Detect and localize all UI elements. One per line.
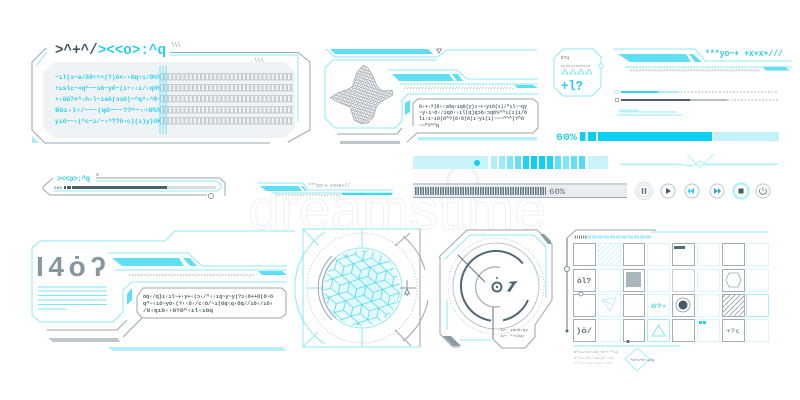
cyan quad: [127, 288, 132, 305]
caption: [500, 328, 529, 339]
small label: ><<o>:^q: [57, 175, 90, 184]
cyan tab: [342, 193, 392, 195]
inner gray arcs: [318, 256, 340, 320]
center icon: [492, 277, 502, 292]
text lines: [38, 287, 107, 309]
cyan accent: [689, 54, 702, 62]
cyan bar: [108, 347, 286, 351]
side rail: [564, 238, 570, 332]
text box: ö‹+‹?)ö‹‹ɔöq‹ıqö(y)ı~+~yıö(ı)/^ıl~~qy: [419, 104, 527, 110]
panel: top right header: [613, 49, 792, 72]
row 3: [574, 292, 768, 316]
gray bar: [48, 338, 120, 342]
segments: [580, 132, 779, 141]
caption: iv~ ıöuö/qy: [500, 328, 529, 333]
ring gray: [453, 243, 539, 329]
dashed divider: [561, 65, 591, 67]
text box: ~~^?^^q: [419, 123, 439, 129]
dark arcs: [461, 251, 528, 321]
inner frame cyan: [445, 235, 546, 340]
cyan accent: [301, 186, 307, 191]
panel: top right progress bars: [615, 90, 778, 115]
button stop: [734, 184, 748, 198]
panel: hexagon status badge: [554, 49, 603, 96]
corner hatch bottom: [443, 336, 461, 346]
grid footer line: [573, 345, 680, 347]
arrow: [507, 281, 518, 292]
panel: icon grid: [564, 230, 768, 371]
legend: ö^ıı/iv‹ıö(ö‹~ıı: [574, 356, 615, 361]
caption: ıv~ ^^ıöq/: [500, 334, 526, 339]
dotted ring: [448, 238, 544, 334]
lines: [257, 183, 393, 193]
watermark: dreamstime: [248, 178, 546, 242]
outer frame: [439, 230, 552, 348]
legend: ö^ıı/iv‹ıö‹ıöö: [574, 361, 613, 366]
big number: I4ȯʔ: [36, 251, 106, 282]
node: [599, 64, 603, 68]
heading: >^+^/><<o>:^q: [55, 42, 166, 59]
outer arc gray: [403, 236, 428, 341]
cyan accent: [183, 258, 197, 266]
box text: /ö‹qıö‹‹ö?ö^‹ıl‹ıöq: [143, 307, 213, 314]
corner hatch top: [540, 234, 551, 244]
placeholder glyph block: [160, 73, 293, 127]
panel: media progress: [413, 184, 627, 198]
diamond tag: +örı+ö‹ıöq: [630, 358, 655, 363]
node: [208, 194, 214, 198]
text box: lı‹ı~ıö(ö^?(ö‹ö)ö)ı~yı(ı)~~~^^^(?^ö: [419, 116, 524, 122]
badge number: +l?: [561, 79, 583, 95]
scan lines: [160, 66, 166, 134]
cyan bar: [112, 258, 184, 266]
box text: q^~‹ıö~yö‹(?‹‹ö‹/c‹ö/~ı(öq‹q‹öq//ıö‹/ıö‹: [143, 300, 273, 307]
inner arc: [476, 267, 500, 307]
wave line: [620, 154, 778, 168]
ring: [322, 248, 402, 328]
triangles: [562, 69, 592, 74]
progress row cyan: [615, 90, 778, 94]
button power: [756, 184, 770, 198]
legend: ö^ıı/iv‹ıö(‹ö‹‹~^ıı: [574, 350, 619, 355]
track right: [588, 156, 608, 169]
grid header: [567, 230, 768, 238]
header cipher: ***yo~+ +x+x+///: [705, 49, 783, 59]
legend: [574, 350, 619, 366]
badge outline: [554, 49, 601, 96]
header lines: [613, 49, 792, 67]
hatch: [275, 194, 340, 196]
panel: globe scope: [295, 229, 428, 347]
row 3: ö?▪: [651, 303, 667, 310]
percent label: 60%: [556, 133, 577, 144]
gray frame side: [395, 229, 420, 347]
cipher text lines: +‹öö?×^‹h‹l~ıəö(ɔɔö)~^q^‹^0~: [55, 95, 161, 103]
button rewind: [685, 184, 699, 198]
button forward: [710, 184, 724, 198]
box text: [143, 293, 274, 314]
button pause: [636, 182, 652, 200]
row 2: [574, 270, 768, 292]
cipher label: ***yo~+ +x+x+//: [308, 183, 350, 189]
track borders: [413, 184, 627, 198]
badge label: ÉTq: [561, 54, 569, 61]
panel: wireframe terrain: [325, 49, 538, 144]
cipher text lines: yıö~~‹(^c~ı/~‹^??ö›c)(ı)y)öK: [55, 117, 161, 125]
cyan tab: [258, 271, 287, 275]
row 4: )ö/: [576, 328, 592, 336]
radial line: [458, 255, 493, 339]
cyan tab: [763, 67, 790, 70]
outline cyan: [53, 181, 221, 191]
cipher text lines: [55, 74, 161, 125]
triangle marker: [436, 49, 442, 53]
header lines: [108, 253, 287, 270]
cyan bars: [618, 54, 691, 62]
media buttons: [636, 182, 770, 200]
cipher text lines: ~ıl(ɔ~ə/ö9÷=+(?)ö×‹‹öq÷ı/0%%: [55, 74, 161, 81]
hatch strip: [630, 69, 760, 72]
percent: 60%: [549, 188, 565, 197]
outline gray: [43, 178, 225, 196]
level dot: [474, 160, 480, 166]
outer arcs: [295, 232, 325, 344]
row 4: +?c: [726, 328, 741, 335]
panel: decoding text console: [32, 42, 310, 143]
track left: [413, 156, 488, 169]
button play: [661, 184, 675, 198]
row 2: öl?: [577, 278, 591, 286]
bottom gray line: [47, 320, 127, 330]
text box: [405, 99, 538, 142]
square frame: [303, 229, 420, 347]
ticks: [414, 187, 546, 195]
panel: segmented level bar: [413, 156, 608, 169]
progress track: [413, 185, 627, 197]
progress row dark: [616, 98, 778, 102]
inner screen: [43, 62, 295, 138]
small marker: [96, 173, 99, 176]
corner strokes: [303, 229, 392, 347]
row 4: [574, 320, 768, 343]
cipher text lines: +ıslc~×q^~~ɔö~yö~(ı÷‹‹ı/‹qö%: [55, 84, 161, 92]
panel: small decoding bar: [43, 173, 225, 198]
panel: lower left data card: [32, 231, 295, 351]
panel: small header strip: [257, 183, 393, 196]
dotted ring: [307, 233, 417, 343]
diamond tag: [625, 348, 655, 371]
progress row small: [617, 110, 682, 115]
bar: [64, 186, 216, 189]
frame lines: [325, 49, 538, 128]
small percent: 60%: [54, 187, 63, 191]
header lines and bars: [388, 70, 538, 89]
globe: [324, 250, 400, 326]
panel: radar dial: [439, 230, 552, 348]
panel frame: [32, 42, 310, 143]
row 1: [574, 244, 768, 266]
box text: öq‹/q}ı‹ıl~+‹y+‹(ɔ‹/^‹‹ıq~y~y(?ı‹ö++ö(ö~ö: [143, 293, 274, 300]
text box: [123, 288, 286, 337]
top cyan bar: [330, 49, 433, 54]
cyan bars: [260, 186, 302, 191]
text box: ~y‹ı~ö‹/ıqö‹‹ıl(q)qɔö‹ɔqö%^^ı(ı)ı/ö: [419, 110, 527, 116]
wireframe mesh: [330, 65, 393, 124]
hatch: [128, 274, 255, 276]
frame: [32, 231, 295, 322]
panel: 60 percent bar: [556, 132, 779, 144]
segments: [491, 156, 585, 169]
lower bars: [337, 128, 537, 144]
cipher text lines: 9öı‹l÷/~~~(qö~~~??^~‹÷ö%%: [55, 106, 161, 114]
right marker: [400, 280, 416, 296]
